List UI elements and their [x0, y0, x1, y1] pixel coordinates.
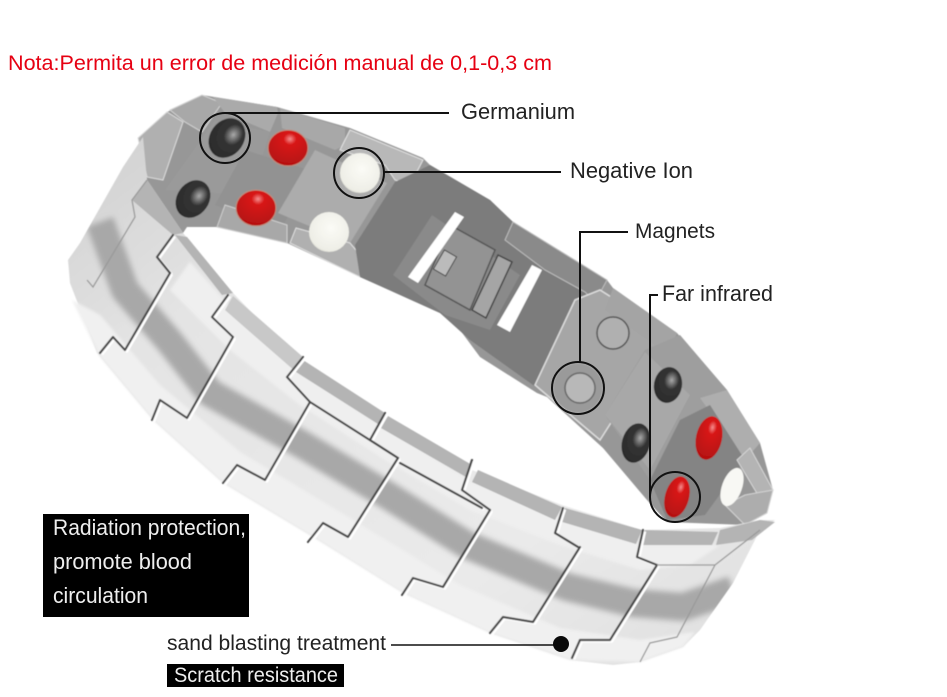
- callout: Far infrared: Far infrared: [662, 281, 773, 306]
- callout: Magnets: Magnets: [635, 220, 715, 243]
- callout: sand blasting treatment: [167, 632, 569, 655]
- icon: germanium stones: [168, 111, 685, 466]
- callout: Germanium: Germanium: [461, 99, 575, 124]
- clasp: [355, 165, 600, 390]
- title note: Nota:Permita un error de medición manual de 0,1-0,3 cm: [8, 51, 552, 75]
- inner rim strips: [132, 180, 775, 545]
- front band: [68, 137, 775, 665]
- icon: magnets: [554, 317, 629, 412]
- magnet link panels: [535, 290, 668, 440]
- left end tabs: [138, 112, 183, 180]
- panel: radiation protection: promote blood: [53, 549, 192, 574]
- callout: Far infrared: [650, 281, 773, 522]
- link panels: [165, 120, 270, 195]
- bright inner row: [170, 262, 720, 570]
- icon: negative ion stones: [309, 153, 748, 509]
- link seams: [100, 235, 657, 658]
- panel: radiation protection: [43, 514, 249, 617]
- callout: sand blasting treatment: sand blasting treatment: [167, 632, 386, 655]
- icon: far infrared stones: [236, 130, 726, 520]
- seam highlights: [102, 236, 659, 660]
- panel: radiation protection: circulation: [53, 583, 148, 608]
- infographic canvas: [10, 54, 775, 687]
- back band with magnets and stones: [138, 95, 773, 525]
- callout: Negative Ion: [334, 148, 693, 198]
- label: scratch resistance: Scratch resistance: [174, 664, 338, 687]
- faint outer seams: [87, 180, 760, 662]
- panel: radiation protection: Radiation protection,: [53, 515, 246, 540]
- matte centre stripe: [100, 222, 733, 607]
- callout: Magnets: [552, 220, 715, 414]
- callout: Negative Ion: Negative Ion: [570, 158, 693, 183]
- callout: Germanium: [200, 99, 575, 163]
- bracelet: [68, 95, 775, 665]
- bright outer row: [72, 300, 695, 662]
